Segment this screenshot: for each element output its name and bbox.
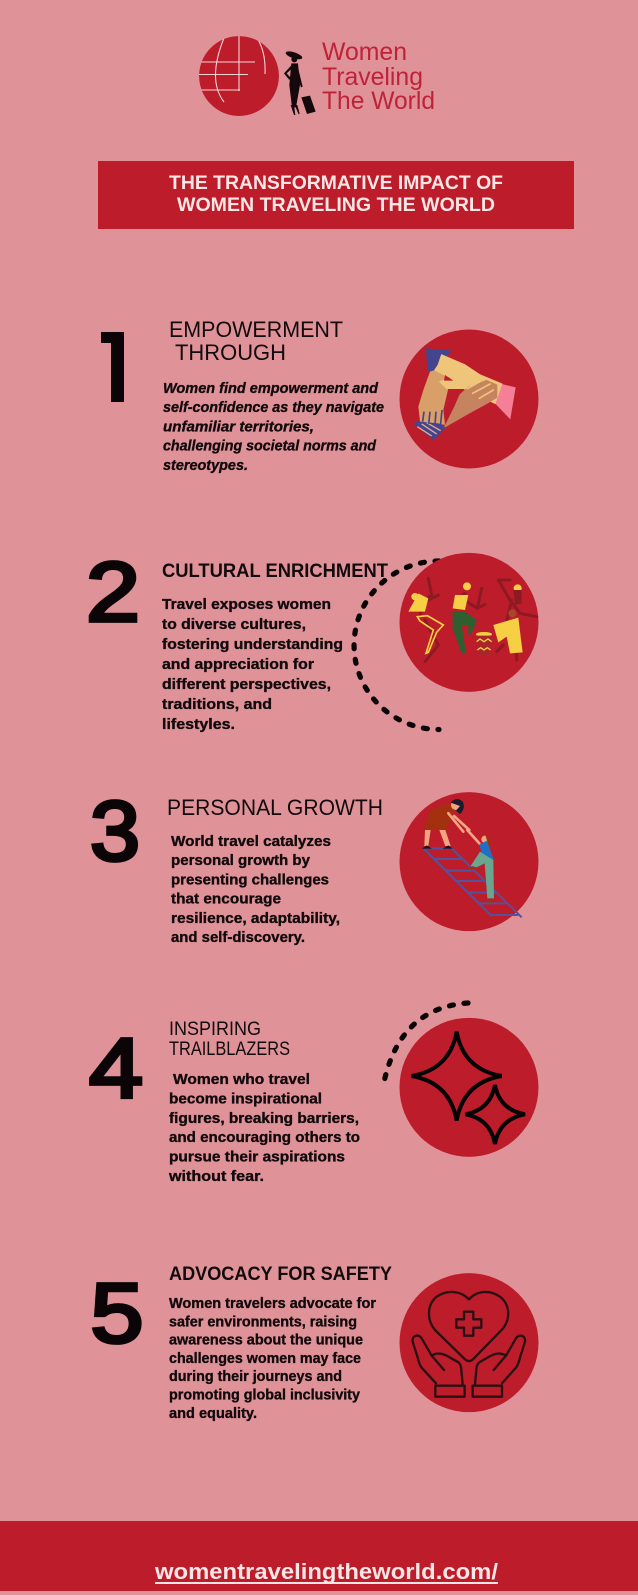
body text 2: Travel exposes women (162, 597, 331, 613)
section 2: cultural enrichment (86, 545, 538, 733)
body text 5: Women travelers advocate for (169, 1296, 376, 1312)
section 1: empowerment (88, 317, 538, 474)
body text 4: pursue their aspirations (169, 1150, 345, 1166)
body text 5 (169, 1296, 376, 1422)
logo wordmark: The World (322, 87, 435, 115)
body text 3: resilience, adaptability, (171, 911, 340, 927)
section 3: personal growth (90, 784, 538, 946)
body text 3: presenting challenges (171, 872, 329, 888)
body text 3 (171, 834, 340, 946)
heading 1: THROUGH (175, 340, 286, 365)
logo wordmark: Women (322, 38, 407, 66)
number 1 (101, 332, 124, 402)
body text 3: that encourage (171, 892, 281, 908)
number 5: 5 (90, 1266, 144, 1360)
body text 4 (168, 1072, 360, 1185)
heading 4: TRAILBLAZERS (169, 1038, 290, 1060)
section 5: advocacy for safety (90, 1263, 538, 1422)
footer bar (0, 1521, 638, 1591)
body text 4: figures, breaking barriers, (169, 1111, 359, 1127)
body text 1: unfamiliar territories, (163, 419, 314, 435)
body text 4: without fear. (168, 1169, 264, 1185)
body text 5: challenges women may face (169, 1351, 361, 1367)
heading 3: PERSONAL GROWTH (167, 795, 383, 820)
body text 1: challenging societal norms and (163, 439, 377, 455)
body text 4: and encouraging others to (169, 1130, 360, 1146)
body text 5: during their journeys and (169, 1369, 342, 1385)
logo (198, 34, 435, 116)
website link text: womentravelingtheworld.com/ (154, 1559, 499, 1584)
body text 5: and equality. (169, 1406, 257, 1422)
icon: sparkles (399, 1018, 538, 1157)
body text 5: safer environments, raising (169, 1314, 357, 1330)
body text 2 (162, 597, 343, 733)
logo wordmark: Traveling (322, 63, 423, 91)
dashed arc 4 (383, 1003, 468, 1087)
body text 3: personal growth by (171, 853, 310, 869)
title banner: WOMEN TRAVELING THE WORLD (177, 194, 495, 216)
heading 4 (169, 1018, 290, 1060)
heading 5: ADVOCACY FOR SAFETY (169, 1263, 392, 1285)
heading 2: CULTURAL ENRICHMENT (162, 560, 388, 582)
logo wordmark (322, 38, 435, 115)
number 1: 1 (88, 319, 141, 413)
icon: joined hands (399, 329, 538, 468)
body text 1: Women find empowerment and (163, 381, 379, 397)
body text 2: different perspectives, (162, 677, 331, 693)
body text 2: lifestyles. (162, 717, 235, 733)
heading 1: EMPOWERMENT (169, 317, 343, 342)
body text 2: fostering understanding (162, 637, 343, 653)
icon: hands holding heart (399, 1273, 538, 1412)
body text 2: and appreciation for (162, 657, 314, 673)
number 4: 4 (89, 1021, 143, 1115)
body text 1: self-confidence as they navigate (163, 400, 384, 416)
body text 1: stereotypes. (163, 458, 248, 474)
number 3: 3 (90, 784, 140, 878)
body text 2: traditions, and (162, 697, 272, 713)
icon: woman helping another climb a ladder (399, 792, 538, 931)
icon: woman traveler with suitcase (284, 50, 316, 115)
body text 4: become inspirational (169, 1091, 322, 1107)
body text 5: promoting global inclusivity (169, 1388, 360, 1404)
body text 3: World travel catalyzes (171, 834, 331, 850)
heading 1 (169, 317, 343, 365)
body text 4: Women who travel (173, 1072, 310, 1088)
heading 4: INSPIRING (169, 1018, 261, 1040)
icon: dancers and drum (399, 553, 538, 692)
body text 1 (163, 381, 384, 474)
body text 3: and self-discovery. (171, 930, 305, 946)
title banner: THE TRANSFORMATIVE IMPACT OF (169, 172, 503, 194)
body text 2: to diverse cultures, (162, 617, 306, 633)
title banner (98, 161, 574, 229)
number 2: 2 (86, 545, 140, 639)
section 4: inspiring trailblazers (89, 1003, 538, 1185)
body text 5: awareness about the unique (169, 1333, 363, 1349)
icon: globe (198, 34, 279, 116)
dashed arc 2 (354, 561, 439, 730)
